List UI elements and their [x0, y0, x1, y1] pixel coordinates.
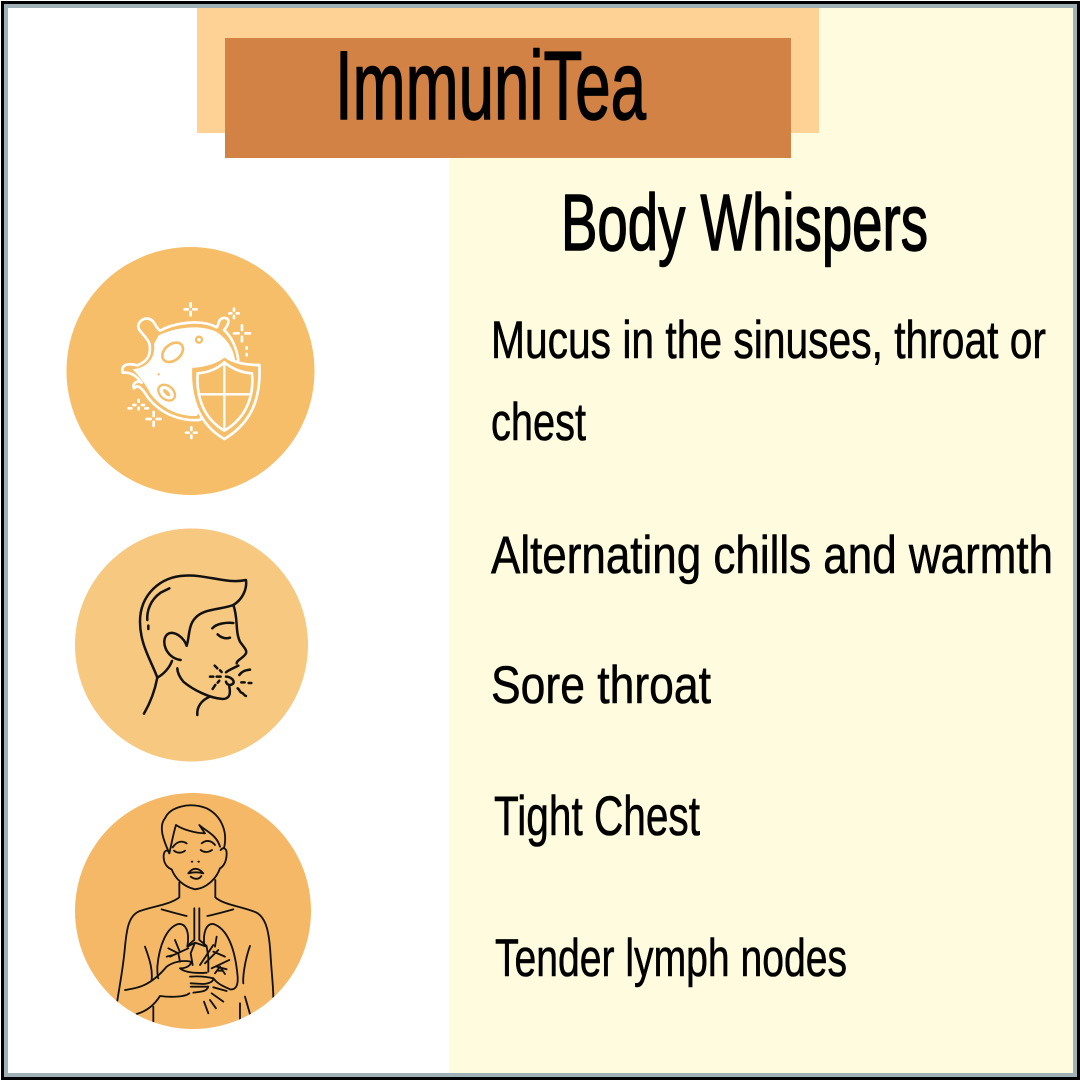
title banner front panel: [225, 38, 791, 158]
panel: cream symptoms background: [449, 8, 1073, 1073]
symptom list: [491, 311, 1053, 988]
title banner back panel: [197, 8, 819, 133]
icon: person coughing: [75, 528, 308, 762]
symptom: mucus: chest: [491, 393, 586, 452]
icon: person with sore lungs: [75, 793, 311, 1029]
symptom: sore throat: Sore throat: [491, 656, 711, 715]
title: ImmuniTea: [335, 31, 646, 140]
symptom: tender lymph nodes: Tender lymph nodes: [495, 929, 847, 988]
symptom: mucus: [491, 311, 1046, 452]
symptom: tight chest: Tight Chest: [494, 784, 700, 847]
icon: virus and shield: [66, 247, 314, 495]
